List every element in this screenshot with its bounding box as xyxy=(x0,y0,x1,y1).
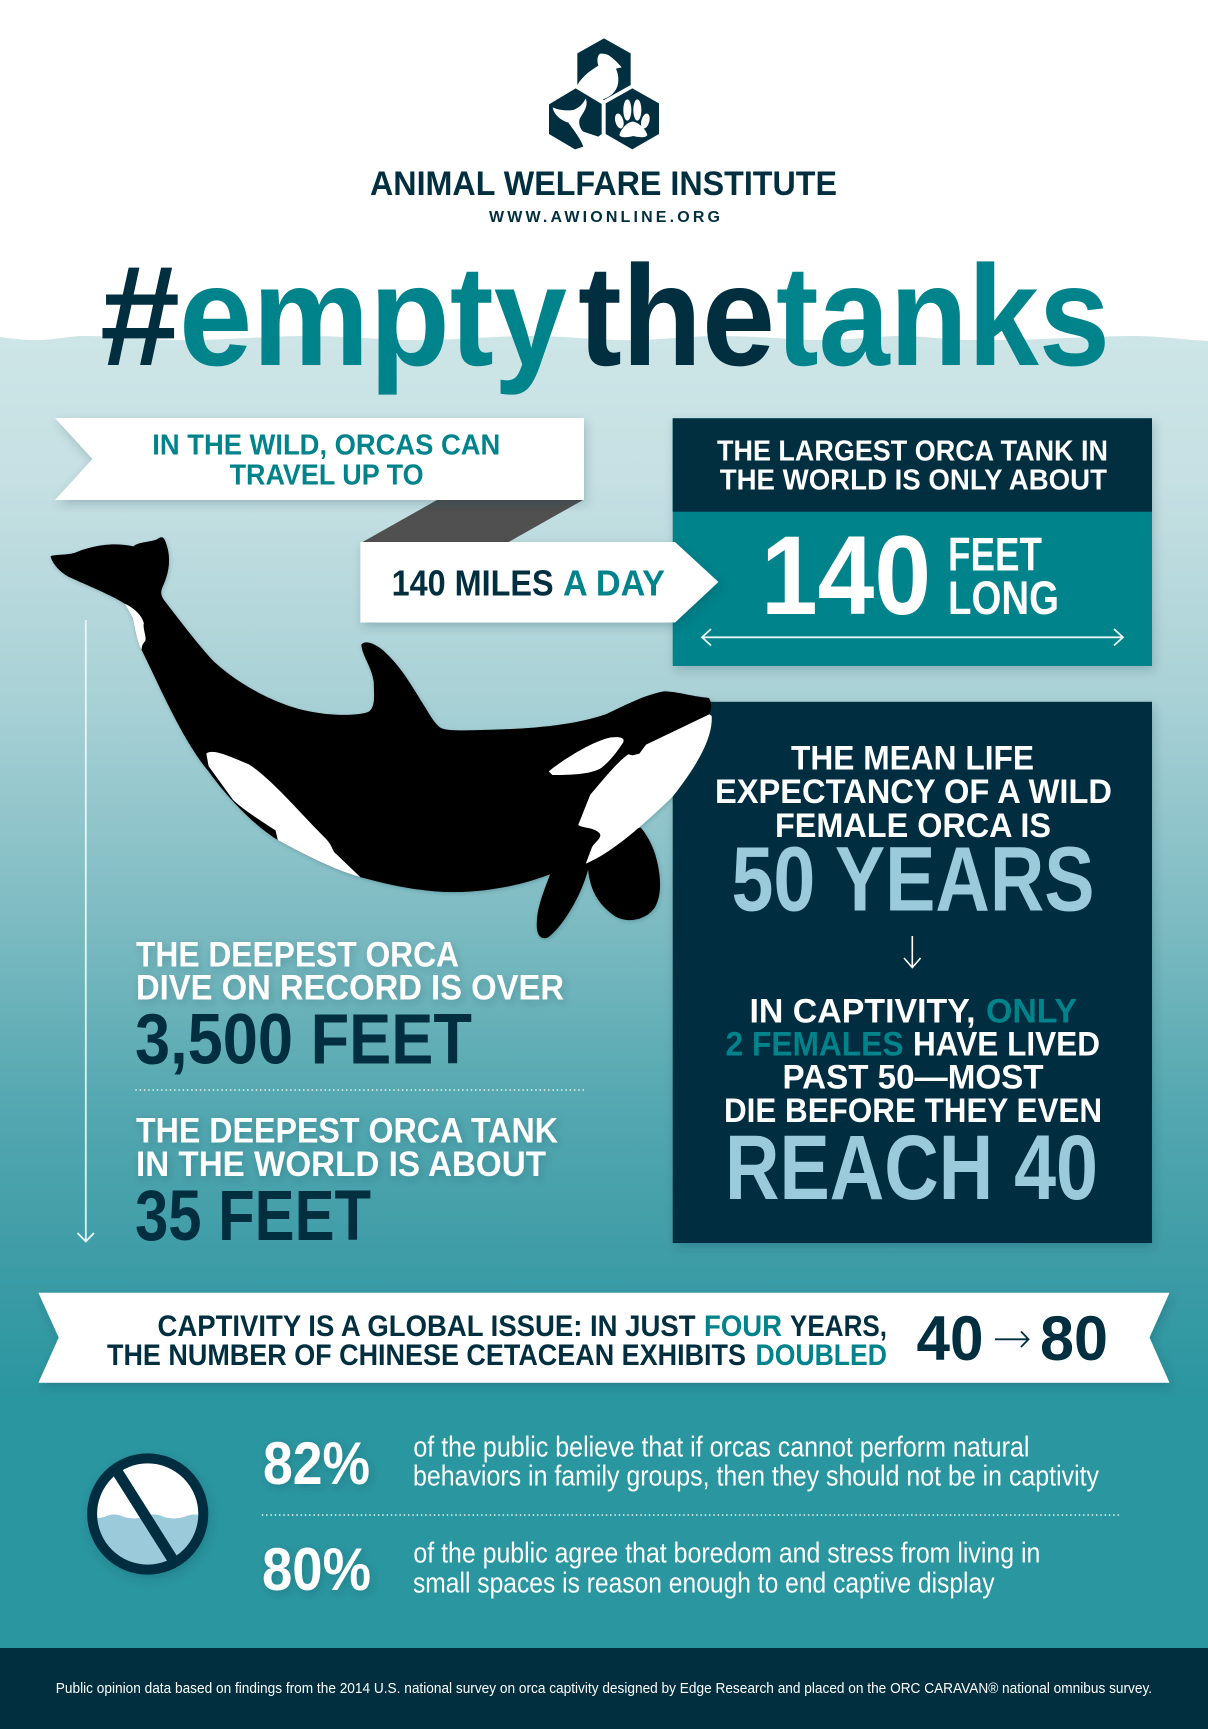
tank heading xyxy=(717,436,1108,496)
banner text: THE NUMBER OF CHINESE CETACEAN EXHIBITS xyxy=(107,1339,746,1372)
wild life expectancy text: FEMALE ORCA IS xyxy=(775,807,1051,845)
title: #emptythetanks: the xyxy=(578,237,775,396)
50 years: 50 YEARS xyxy=(732,828,1094,930)
whale white markings xyxy=(125,604,712,877)
logo: Animal Welfare Institute xyxy=(370,38,837,226)
text block: deepest tank: THE DEEPEST ORCA TANK xyxy=(136,1112,558,1151)
140 feet long: FEET xyxy=(948,529,1042,582)
stat: 80 percent xyxy=(262,1536,1040,1603)
panel: largest orca tank xyxy=(673,418,1152,666)
banner text: FOUR xyxy=(704,1310,782,1343)
text block: deepest tank xyxy=(135,1112,558,1256)
captivity text: IN CAPTIVITY, xyxy=(750,993,976,1031)
text block: deepest tank: 35 FEET xyxy=(135,1176,371,1256)
arrow: tank length xyxy=(702,629,1123,646)
ribbon: 140 miles a day: A DAY xyxy=(563,563,665,604)
captivity text: PAST 50—MOST xyxy=(782,1059,1044,1097)
captivity text: 2 FEMALES xyxy=(726,1025,904,1063)
arrow: depth line xyxy=(78,620,94,1242)
orca whale illustration xyxy=(51,537,712,938)
website: WWW.AWIONLINE.ORG xyxy=(489,209,720,226)
title: #emptythetanks: tanks xyxy=(776,237,1110,396)
stat: 80 percent: of the public agree that boredom and stress from living in xyxy=(413,1538,1040,1570)
wild life expectancy text: EXPECTANCY OF A WILD xyxy=(715,773,1112,811)
ribbon: 140 miles a day xyxy=(360,542,718,622)
40 to 80 figures: 40 xyxy=(916,1304,984,1374)
arrow: down xyxy=(904,936,921,968)
140 feet long xyxy=(761,513,1059,638)
footer: source note: Public opinion data based on findings from the 2014 U.S. national survey on orca captivity designed by Edge Research and placed on the ORC CARAVAN® national omnibus survey. xyxy=(56,1681,1152,1697)
text block: deepest dive: 3,500 FEET xyxy=(135,999,472,1079)
text block: deepest dive: DIVE ON RECORD IS OVER xyxy=(136,968,564,1007)
wild life expectancy text xyxy=(715,739,1112,845)
ribbon fold xyxy=(363,500,583,542)
banner text xyxy=(107,1310,887,1372)
ribbon: in the wild, orcas can travel up to: TRAVEL UP TO xyxy=(230,460,424,492)
captivity text: ONLY xyxy=(986,993,1077,1031)
footer: source note xyxy=(0,1648,1208,1729)
captivity text: HAVE LIVED xyxy=(913,1025,1100,1063)
title: #emptythetanks xyxy=(100,237,1110,396)
icon: no water tanks xyxy=(90,1458,208,1575)
text block: deepest tank: IN THE WORLD IS ABOUT xyxy=(136,1145,546,1184)
banner text: DOUBLED xyxy=(756,1339,887,1372)
stat: 80 percent: small spaces is reason enough to end captive display xyxy=(413,1567,995,1599)
ribbon: in the wild, orcas can travel up to: IN THE WILD, ORCAS CAN xyxy=(152,429,500,461)
logo wordmark: ANIMAL WELFARE INSTITUTE xyxy=(370,165,837,203)
panel: life expectancy xyxy=(673,702,1152,1243)
stat: 82 percent: 82% xyxy=(263,1430,370,1497)
40 to 80 figures: 80 xyxy=(1040,1304,1108,1374)
stat: 82 percent xyxy=(263,1430,1099,1497)
text block: deepest dive: THE DEEPEST ORCA xyxy=(136,936,459,975)
title: #emptythetanks: empty xyxy=(179,237,567,396)
wild life expectancy text: THE MEAN LIFE xyxy=(791,739,1034,777)
tank heading: THE WORLD IS ONLY ABOUT xyxy=(720,464,1107,496)
reach 40: REACH 40 xyxy=(725,1117,1098,1219)
tank heading: THE LARGEST ORCA TANK IN xyxy=(717,436,1108,468)
140 feet long: 140 xyxy=(761,513,931,638)
banner text: YEARS, xyxy=(790,1310,887,1343)
stat: 80 percent: 80% xyxy=(262,1536,371,1603)
ribbon: in the wild, orcas can travel up to xyxy=(55,418,584,500)
ribbon: 140 miles a day: 140 MILES xyxy=(392,563,554,604)
captivity text xyxy=(724,993,1102,1130)
stat: 82 percent: behaviors in family groups, then they should not be in captivity xyxy=(413,1461,1099,1493)
title: #emptythetanks: # xyxy=(100,237,180,396)
captivity text: DIE BEFORE THEY EVEN xyxy=(724,1092,1102,1130)
text block: deepest dive xyxy=(135,936,564,1079)
40 to 80 figures xyxy=(916,1304,1108,1374)
banner text: CAPTIVITY IS A GLOBAL ISSUE: IN JUST xyxy=(158,1310,696,1343)
stat: 82 percent: of the public believe that if orcas cannot perform natural xyxy=(413,1432,1029,1464)
banner: global issue xyxy=(38,1293,1169,1383)
140 feet long: LONG xyxy=(948,572,1059,625)
icon: hexagon logo with bird, whale tail and paw xyxy=(549,38,659,149)
